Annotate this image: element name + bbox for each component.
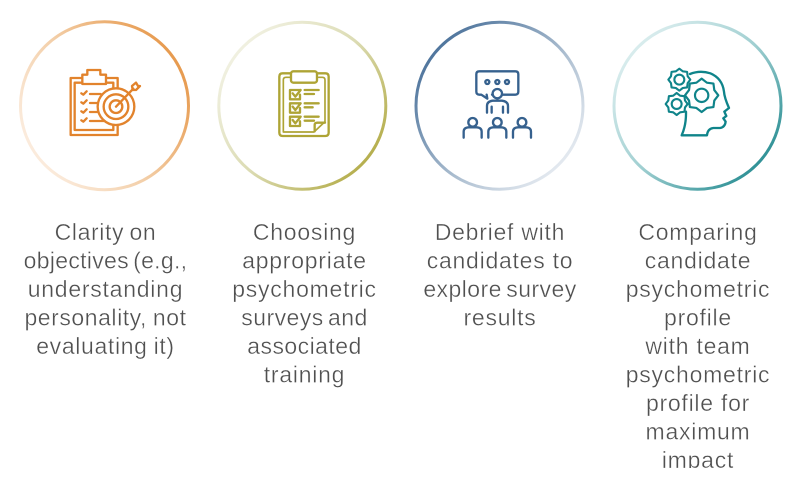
text: clarity on objectives: personality, not — [24, 304, 187, 330]
text: clarity on objectives: objectives (e.g., — [24, 248, 187, 274]
text: debrief with candidates: explore survey — [423, 276, 577, 302]
icon: clipboard checklist — [279, 71, 329, 136]
text: debrief with candidates: Debrief with — [435, 219, 565, 245]
text: comparing profiles: with team — [644, 333, 751, 359]
icon: clipboard with target — [71, 70, 140, 135]
ring: teal circle — [614, 22, 781, 189]
text: clarity on objectives: Clarity on — [55, 219, 156, 245]
text: comparing profiles: profile — [664, 304, 732, 330]
text: choosing surveys: Choosing — [253, 219, 356, 245]
text: comparing profiles: psychometric — [626, 276, 770, 302]
text: comparing profiles: profile for — [646, 390, 750, 416]
text: choosing surveys: associated — [247, 333, 362, 359]
text: debrief with candidates: results — [464, 304, 536, 330]
panel: choosing surveys — [219, 22, 386, 387]
text: comparing profiles: maximum — [646, 418, 750, 444]
icon: head with gears — [666, 69, 729, 135]
text: comparing profiles: candidate — [645, 248, 751, 274]
ring: orange circle — [20, 22, 188, 190]
panel: comparing profiles — [614, 22, 781, 473]
ring: blue circle — [416, 22, 583, 189]
text: clarity on objectives: understanding — [28, 276, 183, 302]
text: choosing surveys: appropriate — [242, 248, 367, 274]
text: debrief with candidates: candidates to — [427, 248, 573, 274]
text: choosing surveys: psychometric — [232, 276, 377, 302]
text: clarity on objectives: evaluating it) — [36, 333, 175, 359]
text: comparing profiles: psychometric — [626, 362, 770, 388]
panel: debrief with candidates — [416, 22, 583, 330]
text: comparing profiles: Comparing — [638, 219, 758, 245]
text: choosing surveys: training — [264, 362, 345, 388]
ring: olive circle — [219, 22, 386, 189]
panel: clarity on objectives — [20, 22, 188, 359]
text: choosing surveys: surveys and — [241, 304, 368, 330]
icon: speaker with audience — [464, 71, 531, 138]
text: comparing profiles: impact — [662, 447, 734, 473]
